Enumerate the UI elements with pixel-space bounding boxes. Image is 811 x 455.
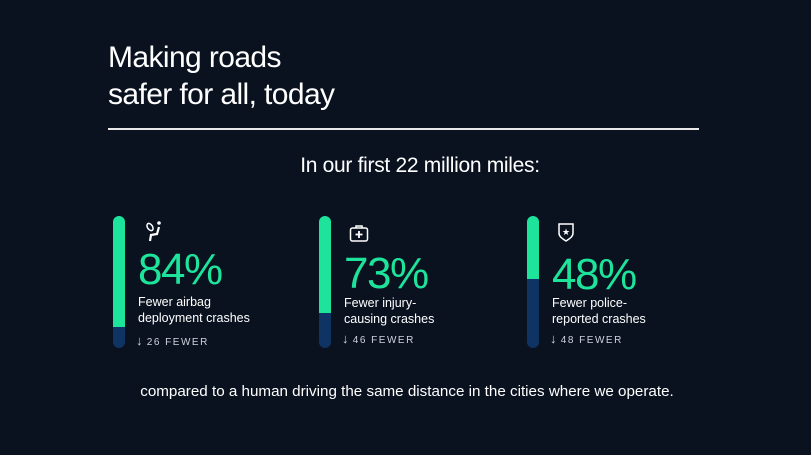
stat: police bbox=[527, 216, 646, 348]
title: Making roads bbox=[108, 41, 281, 74]
title: safer for all, today bbox=[108, 78, 334, 111]
footnote: compared to a human driving the same distance in the cities where we operate. bbox=[140, 383, 674, 400]
label bbox=[138, 295, 250, 325]
count: ↓ 46 FEWER bbox=[342, 331, 415, 346]
stat: airbag bbox=[113, 216, 250, 348]
label: deployment crashes bbox=[138, 311, 250, 325]
stat: injury bbox=[319, 216, 434, 348]
icon: shield bbox=[558, 223, 574, 242]
count: ↓ 48 FEWER bbox=[550, 331, 623, 346]
bar 73% bbox=[319, 216, 331, 348]
icon: shield: ★ bbox=[562, 227, 570, 237]
icon: medical bag bbox=[350, 225, 368, 242]
label: Fewer airbag bbox=[138, 295, 211, 309]
label bbox=[552, 296, 646, 326]
subtitle: In our first 22 million miles: bbox=[300, 154, 540, 177]
label: reported crashes bbox=[552, 312, 646, 326]
label: Fewer police- bbox=[552, 296, 627, 310]
title bbox=[108, 41, 335, 111]
value: 48% bbox=[552, 250, 636, 299]
label: causing crashes bbox=[344, 312, 434, 326]
value: 84% bbox=[138, 245, 222, 294]
count: ↓ 26 FEWER bbox=[136, 333, 209, 348]
label bbox=[344, 296, 434, 326]
label: Fewer injury- bbox=[344, 296, 416, 310]
bar 84% bbox=[113, 216, 125, 348]
bar 48% bbox=[527, 216, 539, 348]
icon: seat bbox=[146, 221, 161, 242]
value: 73% bbox=[344, 249, 428, 298]
